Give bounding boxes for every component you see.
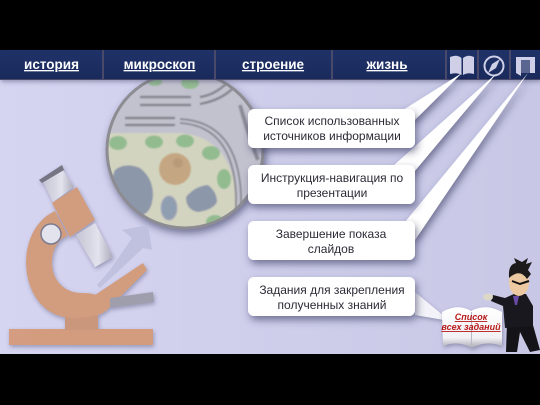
- stem: [65, 315, 98, 330]
- jacket and arm: [491, 294, 533, 328]
- nav tab: жизнь: жизнь: [365, 57, 408, 72]
- arrow to circle: [97, 225, 152, 288]
- info box: sources: источников информации: [263, 129, 401, 143]
- nav tab: история: [0, 50, 102, 79]
- clip: [110, 292, 154, 308]
- tie: [513, 296, 519, 305]
- nav tab: микроскоп: микроскоп: [124, 57, 195, 72]
- focus knob: [41, 224, 61, 244]
- tube lower: [76, 223, 113, 267]
- hand: [483, 294, 493, 300]
- hair: [509, 258, 532, 279]
- legs: [506, 318, 540, 352]
- nav tab: история: история: [24, 57, 79, 72]
- info box: tasks: [248, 277, 415, 316]
- cartoon professor: [483, 258, 540, 352]
- nav button: book: [447, 50, 477, 79]
- nav tab: жизнь: [333, 50, 445, 79]
- tube holder: [52, 187, 95, 237]
- info box: navigation: [248, 165, 415, 204]
- info box: navigation: презентации: [297, 186, 367, 200]
- magnified cell circle: [100, 72, 263, 240]
- stage: [95, 263, 147, 312]
- info box: end show: слайдов: [308, 242, 354, 256]
- nav tab: строение: строение: [242, 57, 305, 72]
- nav button: exit door: [511, 50, 540, 79]
- open book button: всех заданий: [441, 322, 501, 332]
- glasses: [512, 281, 529, 284]
- nav button: compass: [479, 50, 509, 79]
- nav tab: микроскоп: [104, 50, 214, 79]
- info box: sources: Список использованных: [265, 114, 399, 128]
- microscope: [9, 165, 154, 345]
- info box: end show: [248, 221, 415, 260]
- info box: tasks: Задания для закрепления: [259, 283, 405, 297]
- info box: navigation: Инструкция-навигация по: [261, 171, 404, 185]
- open book button: [441, 307, 502, 348]
- info box: tasks: полученных знаний: [278, 298, 386, 312]
- info box: sources: [248, 109, 415, 148]
- tube upper: [43, 170, 74, 202]
- info box: end show: Завершение показа: [276, 227, 387, 241]
- slide: [0, 50, 540, 354]
- open book button: Список: [455, 312, 488, 322]
- base: [9, 329, 153, 345]
- arm: [26, 211, 107, 318]
- callout wedges: [393, 73, 528, 240]
- background: [0, 50, 540, 354]
- wedge to book: [415, 292, 450, 321]
- nav tab: строение: [216, 50, 331, 79]
- navigation bar: [0, 50, 540, 80]
- eyepiece cap: [39, 165, 64, 183]
- head: [509, 268, 529, 296]
